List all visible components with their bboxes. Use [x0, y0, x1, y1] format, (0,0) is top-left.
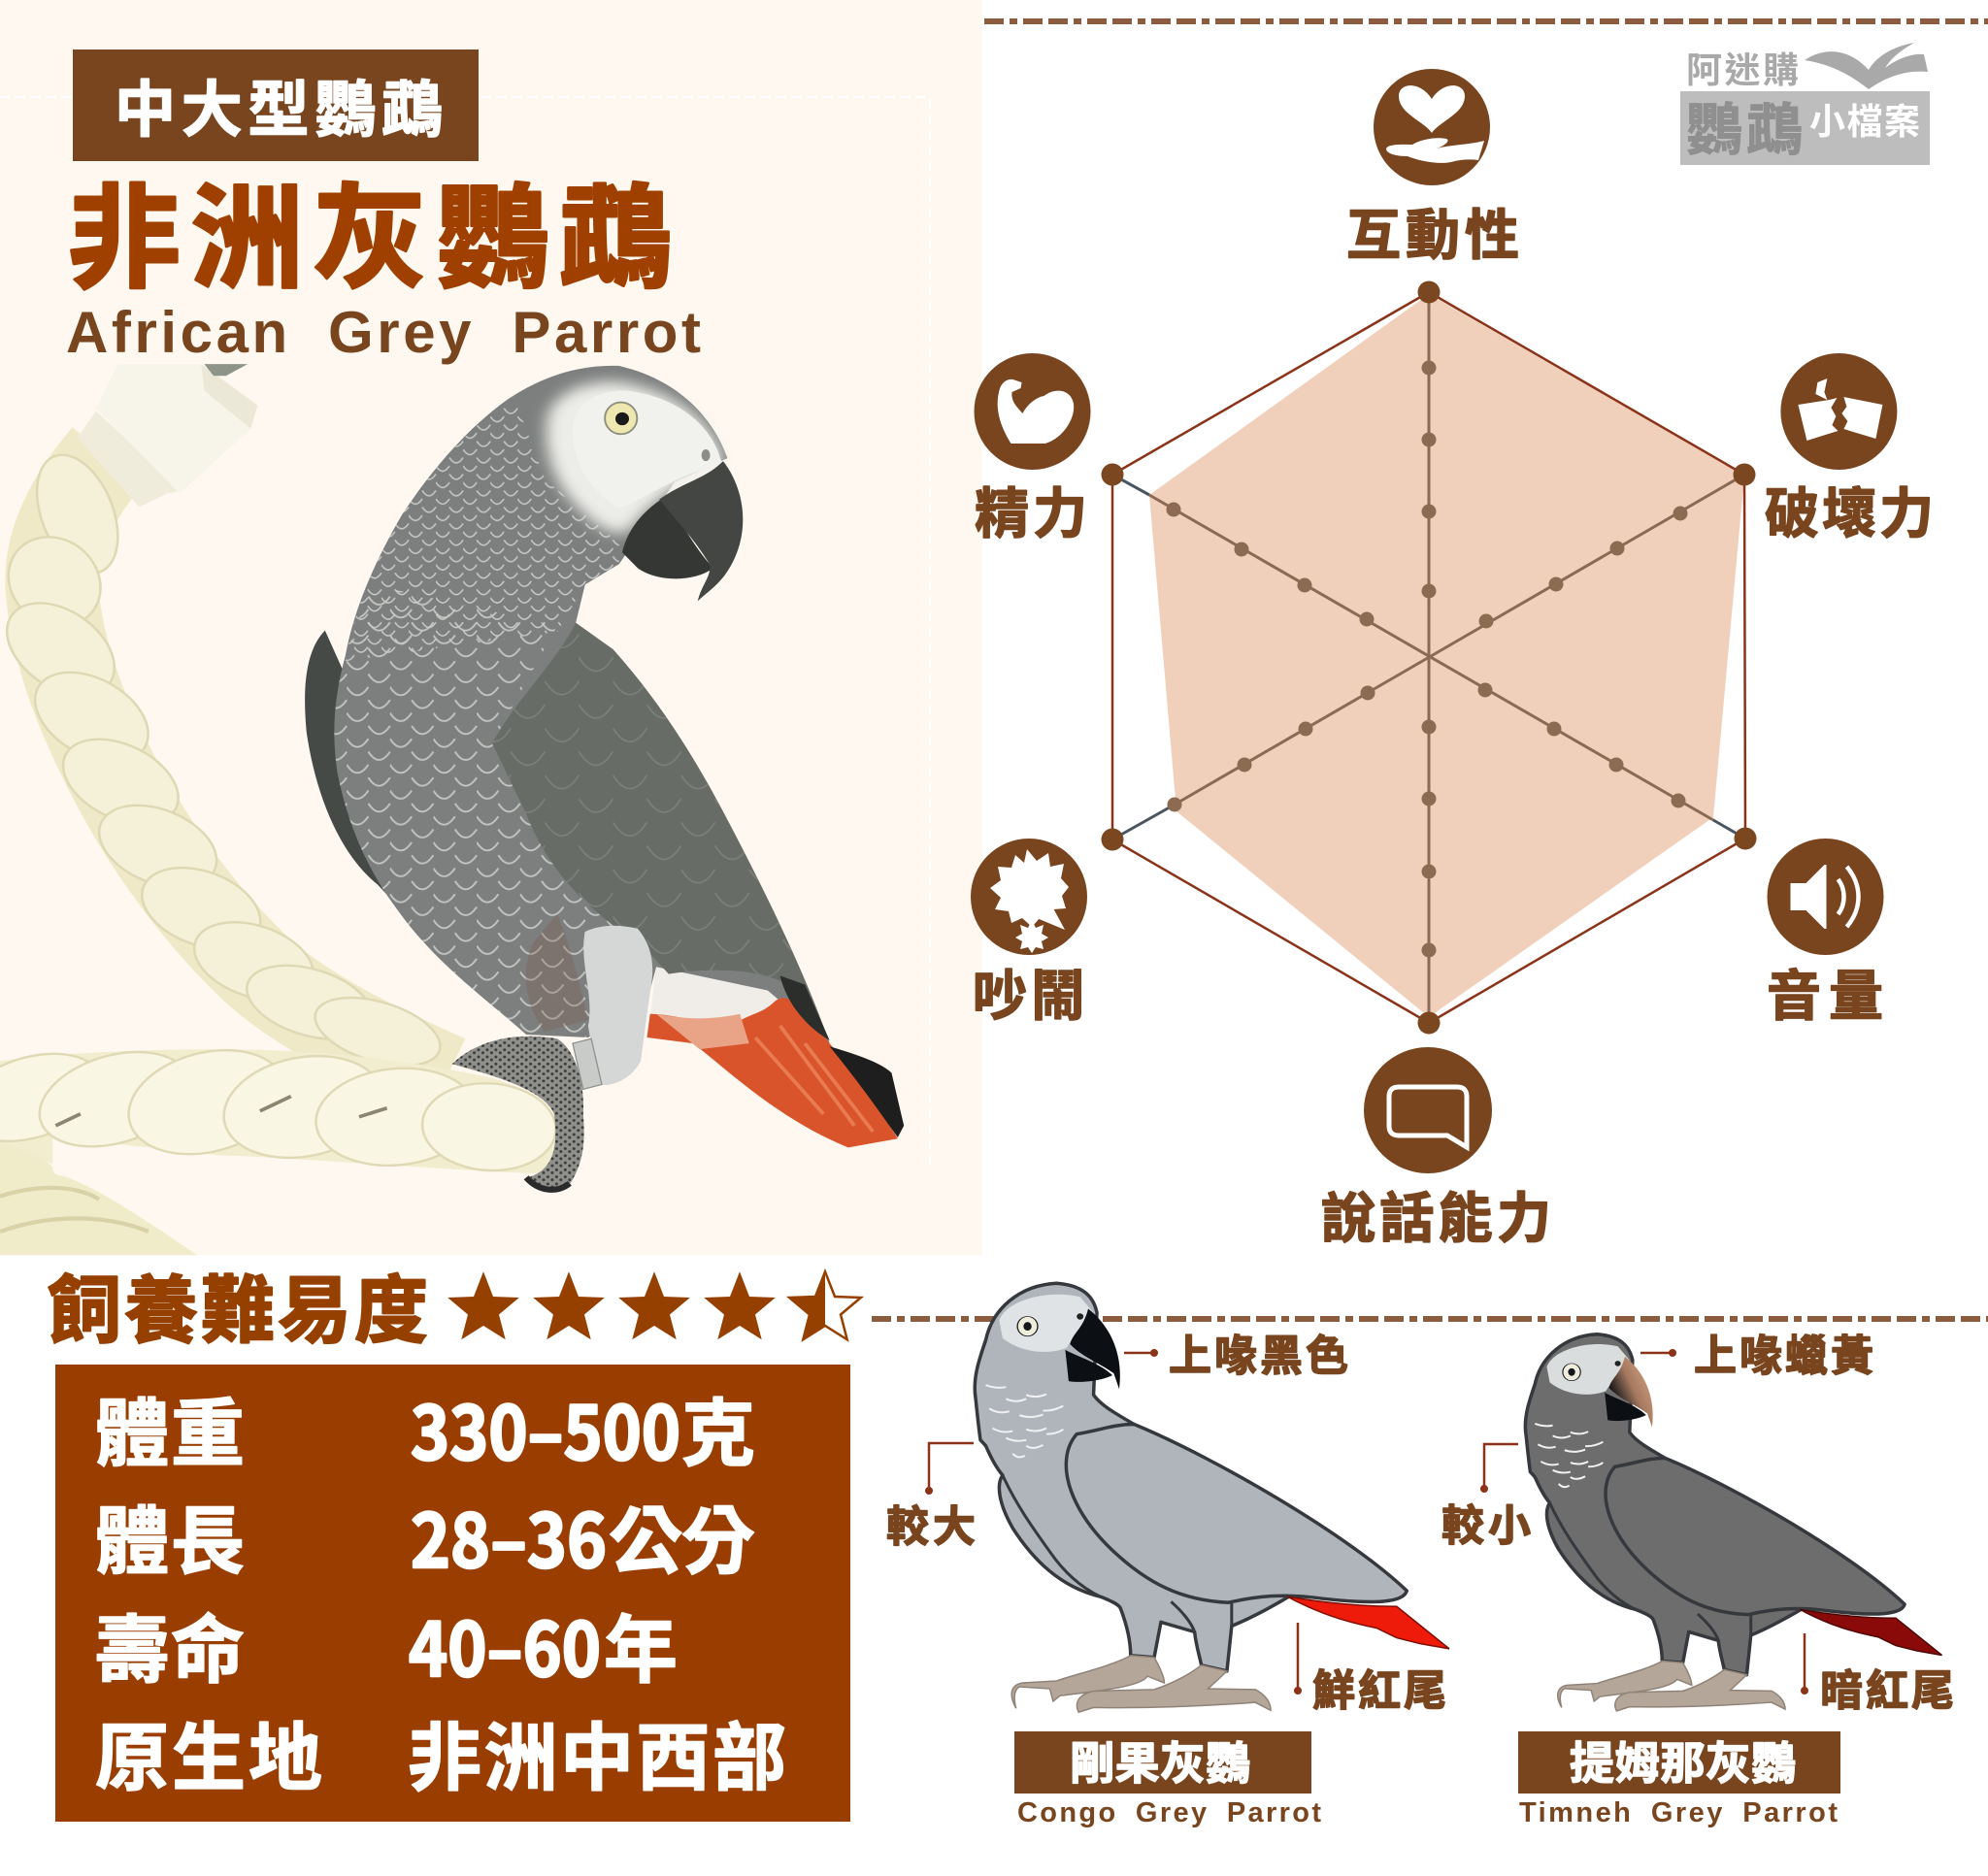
callout: dark red tail: 暗紅尾 [1820, 1656, 1954, 1718]
callout: larger size [886, 1443, 976, 1554]
fact: 壽命: 壽命 [95, 1591, 245, 1697]
fact: 體重: 330–500 [411, 1374, 680, 1481]
icon: speech burst [971, 839, 1087, 955]
logo: 阿迷購鸚鵡小檔案: 鸚鵡 [1686, 84, 1803, 166]
parrot leg and foot [452, 926, 652, 1191]
fact: 壽命: 40–60 [409, 1591, 601, 1697]
dashed line: species comparison [872, 1316, 1988, 1322]
star rating: 4.5 of 5 [447, 1271, 861, 1339]
radar axes [1149, 292, 1744, 1023]
fact: 壽命 [95, 1591, 678, 1697]
callouts: Timneh [1441, 1321, 1954, 1718]
axis: 精力: 精力 [975, 471, 1087, 549]
callout: bright red tail: 鮮紅尾 [1312, 1656, 1446, 1718]
radar dark axis ends [1112, 475, 1745, 839]
radar outer hexagon [1112, 292, 1745, 1023]
dashed line: top right [984, 18, 1988, 24]
axis: 精力 [975, 353, 1091, 549]
axis: 破壞力: 破壞力 [1765, 471, 1934, 549]
panel: species facts [55, 1365, 850, 1822]
axis: 音量 [1767, 839, 1883, 1032]
icon: open book [1805, 43, 1928, 89]
fact: 體長 [95, 1482, 755, 1589]
callout: smaller size [1441, 1444, 1531, 1553]
icon: speaker [1767, 839, 1883, 955]
axis: 說話能力: 說話能力 [1321, 1175, 1551, 1254]
callouts: Congo [886, 1321, 1446, 1718]
radar chart [1101, 281, 1757, 1035]
panel: cream photo background [0, 0, 982, 1255]
axis: 破壞力 [1765, 353, 1934, 549]
title: English name: African Grey Parrot [66, 300, 701, 365]
icon: broken paper [1780, 353, 1897, 470]
logo: 阿迷購鸚鵡小檔案 [1680, 41, 1930, 166]
logo: 阿迷購鸚鵡小檔案: 阿迷購 [1686, 41, 1799, 93]
parrot body [305, 366, 830, 1049]
axis: 互動性 [1346, 69, 1519, 271]
heading: care difficulty with stars: 飼養難易度 [48, 1251, 428, 1358]
axis: 吵鬧 [971, 839, 1087, 1032]
category badge [73, 49, 479, 161]
icon: flexed arm [975, 353, 1091, 470]
fact: 原生地 [95, 1698, 786, 1805]
callout: dark red tail [1801, 1633, 1954, 1718]
fact: 壽命: 年 [604, 1591, 678, 1697]
callout: waxy yellow upper beak: 上喙蠟黃 [1694, 1321, 1873, 1383]
callout: smaller size: 較小 [1441, 1491, 1531, 1553]
rope [0, 444, 559, 1258]
label: Congo grey parrot: 剛果灰鸚 [1070, 1728, 1250, 1793]
callout: larger size: 較大 [886, 1492, 976, 1554]
fact: 體重 [95, 1374, 755, 1481]
label: Congo grey parrot: Congo Grey Parrot [1017, 1797, 1321, 1828]
label: Timneh grey parrot [1518, 1728, 1840, 1828]
fact: 體重: 克 [681, 1374, 755, 1481]
radar filled area [1149, 294, 1744, 1017]
parrot tail [647, 975, 904, 1147]
axis: 說話能力 [1321, 1047, 1551, 1254]
logo: 阿迷購鸚鵡小檔案: 小檔案 [1809, 92, 1920, 145]
fact: 原生地: 原生地 [95, 1698, 322, 1805]
callout: bright red tail [1294, 1623, 1446, 1718]
photo: parrot on rope [0, 364, 904, 1258]
fact: 體長: 28–36 [411, 1482, 607, 1589]
fact: 體重: 體重 [95, 1374, 245, 1481]
fact: 體長: 公分 [609, 1482, 755, 1589]
label: Timneh grey parrot: 提姆那灰鸚 [1570, 1728, 1796, 1793]
label: Congo grey parrot [1014, 1728, 1321, 1828]
panel: title block [66, 49, 701, 365]
icon: heart and hand [1374, 69, 1490, 185]
axis: 互動性: 互動性 [1346, 192, 1519, 271]
radar axis tick dots [1167, 361, 1687, 957]
callout: black upper beak: 上喙黑色 [1169, 1321, 1348, 1383]
title: Chinese name: 非洲灰鸚鵡 [68, 148, 672, 311]
illustration: Congo grey parrot [975, 1283, 1449, 1712]
heading: care difficulty with stars [48, 1251, 861, 1358]
axis: 吵鬧: 吵鬧 [973, 953, 1085, 1032]
rope end cap [78, 364, 257, 507]
axis: 音量: 音量 [1767, 953, 1883, 1032]
fact: 原生地: 非洲中西部 [408, 1698, 786, 1805]
parrot eye [605, 403, 711, 461]
category badge: 中大型鸚鵡 [115, 61, 443, 149]
icon: speech bubble [1364, 1047, 1492, 1173]
radar vertices [1101, 281, 1757, 1035]
parrot beak [622, 461, 743, 601]
illustration: Timneh grey parrot [1525, 1334, 1942, 1711]
label: Timneh grey parrot: Timneh Grey Parrot [1519, 1797, 1838, 1828]
fact: 體長: 體長 [95, 1482, 245, 1589]
